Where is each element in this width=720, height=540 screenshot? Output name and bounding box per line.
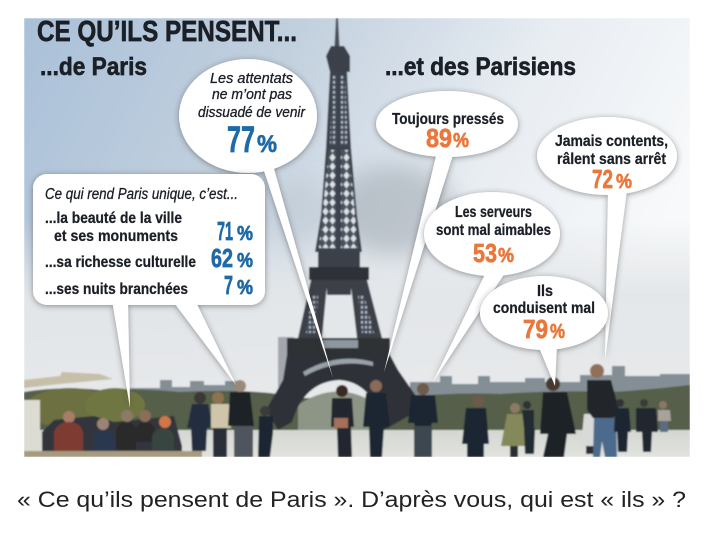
pointer and balloon shape [376,91,518,372]
seated crowd [24,410,202,457]
person in red [54,411,83,452]
heading: de Paris: ...de Paris [40,53,147,81]
walker woman [331,385,354,457]
balloon text: 72 [592,164,613,194]
walker right of tower [408,383,438,457]
balloon text: Les attentats [210,70,293,87]
photo: Eiffel Tower and Trocadero crowd [24,18,690,457]
caption: « Ce qu’ils pensent de Paris ». D’après vous, qui est « ils » ? [17,487,686,512]
balloon text: conduisent mal [493,300,595,317]
walker man [363,380,390,457]
tower top [326,46,350,72]
panel text: ...la beauté de la ville [45,210,182,227]
person teal [152,416,174,450]
panel text: % [237,250,253,272]
person in blue [93,418,115,452]
low wall [24,451,202,457]
bubble: toujours pressés 89% [376,91,518,372]
lower legs with arch [266,355,416,430]
balloon text: sont mal aimables [436,222,551,239]
person dark 2 [135,410,155,442]
arch lattice [303,359,373,376]
walker small [258,406,273,457]
walkers [187,364,671,457]
balloon text [555,133,668,194]
panel text: et ses monuments [54,228,178,245]
shaft lattice lower left [319,150,336,248]
balloon text: ne m’ont pas [212,86,292,103]
clouds behind tower [270,165,455,255]
walker blue jacket [187,392,213,451]
walker boy [462,395,489,457]
walker far right [636,399,658,452]
balloon text: 79 [523,314,548,344]
bubble: conduisent mal 79% [480,276,608,386]
balloon text: % [616,171,632,193]
café awning and kiosk [24,372,113,452]
balloon text: 89 [426,123,452,153]
pointer and balloon shape [537,117,677,360]
pointer and balloon shape [424,192,560,382]
balloon text: 77 [227,119,255,160]
shaft lattice upper [330,76,348,146]
heading: et des Parisiens: ...et des Parisiens [385,53,576,81]
balloon text [436,204,551,268]
balloon text: 53 [473,238,497,268]
pointers and box shape [33,174,265,408]
pointer and balloon shape [179,59,333,378]
trees [24,385,690,436]
crowd mass [42,416,182,457]
panel text: 71 [217,216,233,246]
balloon text: % [257,131,277,158]
sky background [24,18,690,286]
balloon text: Toujours pressés [392,111,504,128]
distant building [278,337,294,387]
trees seen under the arch [298,392,378,432]
heading: Ce qu'ils pensent: CE QU’ILS PENSENT... [37,16,297,48]
balloon text: % [550,321,565,343]
walker woman right [540,377,576,457]
panel text: ...ses nuits branchées [45,281,188,298]
panel text: 62 [211,243,233,273]
walker behind right [614,399,631,452]
bubble: jamais contents 72% [537,117,677,360]
walker light coat [581,414,597,454]
balloon text [493,283,595,344]
walker tall left [228,380,254,457]
panel text: % [237,277,253,299]
balloon text: dissuadé de venir [198,104,306,121]
shaft lattice lower right [341,150,358,248]
tower shaft [315,72,362,252]
plaza [24,430,690,457]
middle legs [298,280,382,338]
balloon text: Ils [537,283,553,300]
balloon text: Les serveurs [455,204,532,221]
panel text: 7 [224,270,233,300]
bubble: attentats 77% [179,59,333,378]
balloon text: % [498,245,514,267]
balloon text: râlent sans arrêt [557,151,666,168]
panel text: ...sa richesse culturelle [45,254,196,271]
first platform [287,338,390,357]
walker behind [522,401,535,454]
tower spire [334,18,340,46]
person dark [116,410,136,450]
balloon text [392,111,504,153]
panel text [45,186,253,300]
panel text: % [237,223,253,245]
balloon text: % [453,130,469,152]
Eiffel Tower [266,18,416,430]
panel text: Ce qui rend Paris unique, c’est... [45,186,238,203]
walker tall right [587,364,619,457]
skyline [130,366,690,395]
panel: ce qui rend Paris unique [33,174,265,408]
balloon text [198,70,306,160]
bubble: serveurs 53% [424,192,560,382]
walker green coat [501,403,526,457]
kiosk [24,400,40,452]
pointer and balloon shape [480,276,608,386]
walker blonde [211,392,231,457]
balloon text: Jamais contents, [555,133,668,150]
walker light far [658,401,671,432]
top of second platform [318,252,360,267]
awning [24,372,113,388]
second platform [309,267,369,280]
